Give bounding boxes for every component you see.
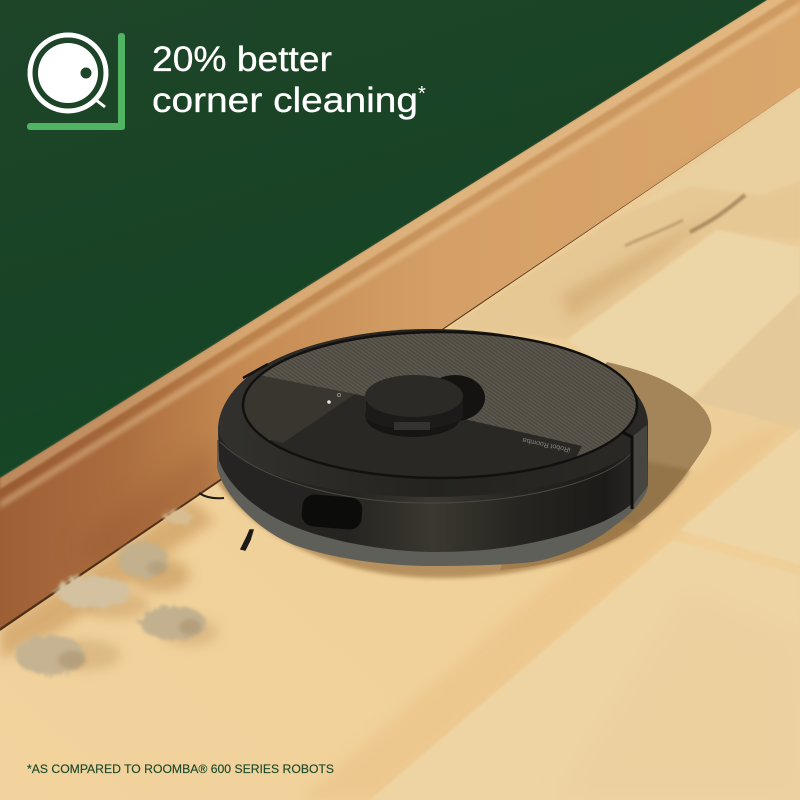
wooden baseboard — [0, 0, 800, 631]
robot body — [218, 330, 648, 552]
pale plank — [567, 230, 800, 400]
lidar turret — [365, 375, 463, 437]
lidar shadow — [425, 375, 485, 421]
footnote: *AS COMPARED TO ROOMBA® 600 SERIES ROBOTS — [27, 762, 334, 776]
headline: * — [418, 83, 426, 105]
headline: corner cleaning — [152, 81, 418, 120]
icon: robot in corner — [27, 33, 125, 130]
camera window — [301, 493, 363, 531]
streaked plank — [450, 208, 641, 336]
headline — [152, 40, 426, 120]
left rim notch — [243, 364, 268, 378]
robot base — [217, 440, 648, 566]
upper plank — [620, 88, 800, 220]
deep strip — [314, 436, 770, 798]
side brush — [199, 493, 253, 550]
brand mark: iRobot Roomba — [522, 436, 571, 453]
pale plank right — [680, 428, 800, 565]
robot shadow — [500, 362, 711, 570]
top disc — [249, 333, 636, 456]
green wall — [0, 0, 770, 480]
headline: 20% better — [152, 40, 332, 79]
indicator lights — [327, 400, 331, 404]
lower light plank — [370, 540, 800, 800]
top rim — [218, 329, 648, 497]
dark panel — [270, 394, 582, 477]
dark edge near board — [0, 500, 215, 660]
right bumper — [632, 425, 648, 507]
dust clumps — [15, 510, 218, 675]
robot vacuum — [199, 320, 650, 566]
